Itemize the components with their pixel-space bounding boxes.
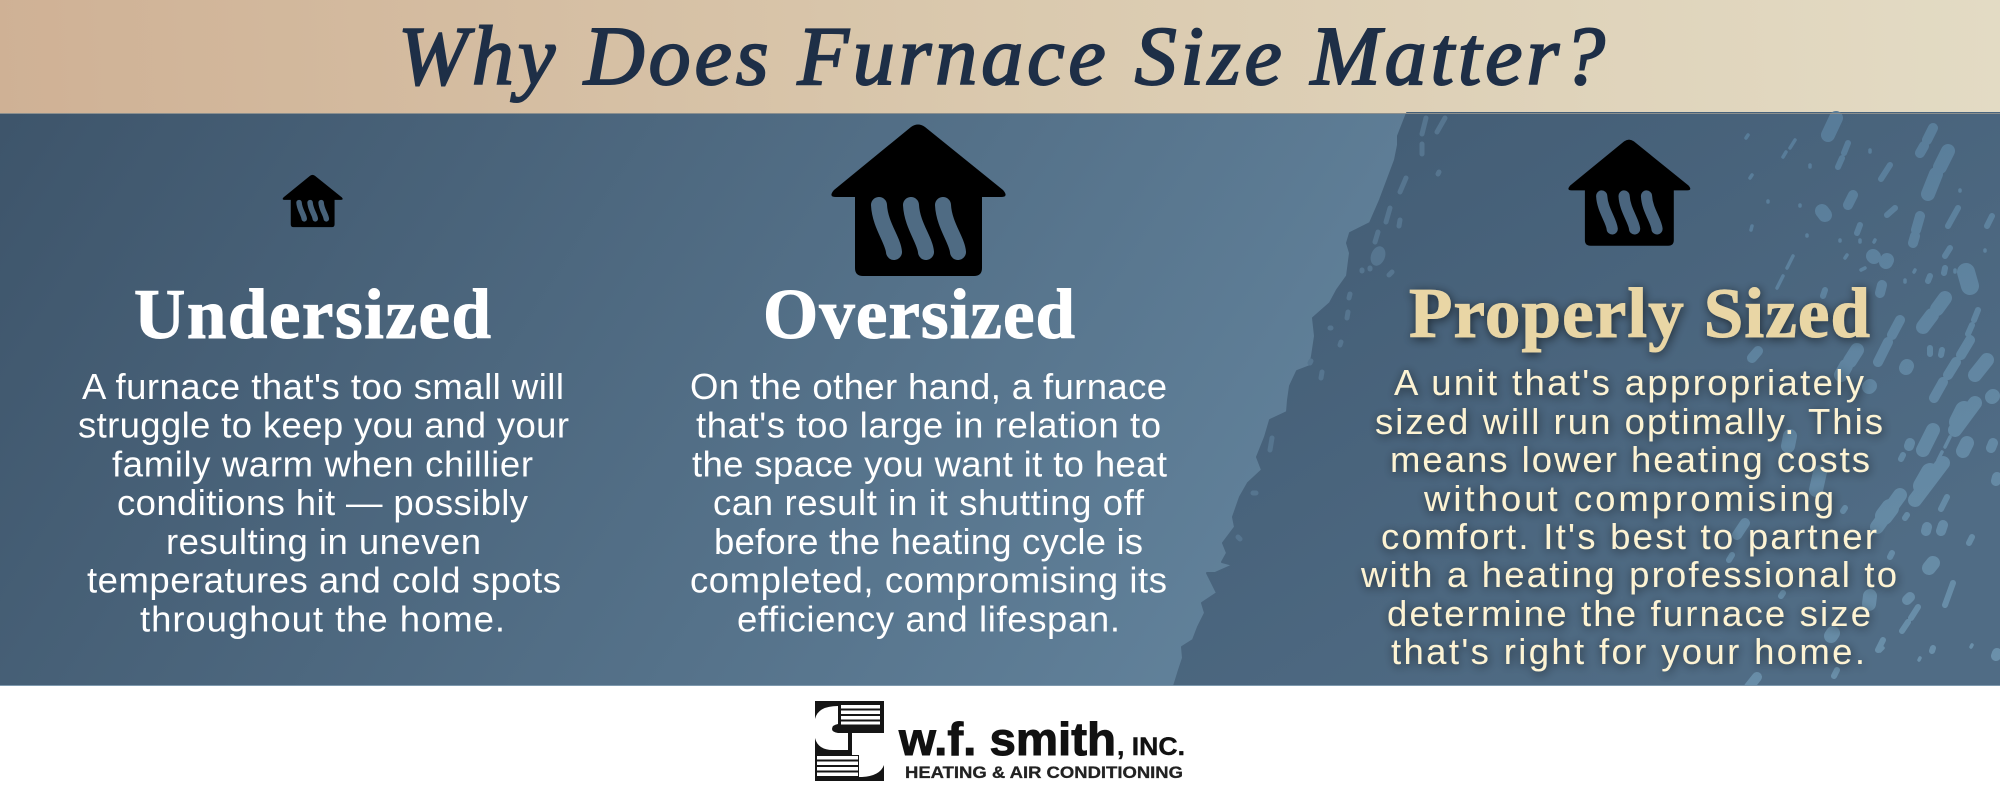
text: properly sized description: without compromising [1423,478,1834,519]
panel: oversized [690,124,1167,640]
text: oversized description: efficiency and lifespan. [737,598,1120,640]
logo tagline: HEATING & AIR CONDITIONING [905,763,1183,782]
text: properly sized description: means lower heating costs [1390,439,1870,480]
panel: properly sized [1360,140,1897,672]
text: undersized description [78,366,569,640]
icon: small furnace house [283,175,343,227]
text: properly sized description: sized will run optimally. This [1375,401,1883,442]
text: properly sized description: A unit that's appropriately [1394,362,1865,403]
text: undersized description: A furnace that's too small will [82,366,564,407]
text: undersized description: family warm when chillier [112,444,533,484]
text: oversized description [690,366,1167,640]
text: undersized description: conditions hit — possibly [117,482,529,523]
textured darker region [1174,113,2000,687]
text: properly sized description: determine the furnace size [1387,593,1871,634]
heading: Undersized: Undersized [134,276,491,354]
text: undersized description: resulting in uneven [166,521,481,562]
footer band [0,686,2000,800]
text: undersized description: throughout the home. [140,598,505,640]
text: properly sized description: that's right for your home. [1391,631,1865,672]
heading: Properly Sized: Properly Sized [1409,275,1870,353]
text: oversized description: that's too large in relation to [696,404,1161,446]
logo name: w.f. smith [898,713,1116,765]
title: Why Does Furnace Size Matter? [398,10,1605,103]
text: oversized description: On the other hand, a furnace [690,366,1167,407]
icon: large furnace house [831,124,1006,276]
panel: undersized [78,175,569,639]
splatter near edge [1238,118,1445,539]
text: properly sized description [1360,362,1897,672]
text: oversized description: before the heating cycle is [714,521,1143,562]
text: undersized description: struggle to keep you and your [78,404,569,446]
text: undersized description: temperatures and cold spots [87,560,561,600]
text: oversized description: the space you want it to heat [692,444,1167,484]
text: oversized description: completed, compromising its [690,560,1167,600]
heading: Oversized: Oversized [763,276,1075,354]
text: properly sized description: comfort. It's best to partner [1381,516,1877,557]
logo suffix: , INC. [1117,733,1185,761]
panel edge line [0,113,2000,114]
header band [0,0,2000,113]
splatter right [1729,118,1997,687]
logo mark [815,701,884,781]
icon: medium furnace house [1568,140,1690,246]
text: oversized description: can result in it shutting off [713,482,1145,523]
logo: w.f. smith, inc. [815,701,1185,782]
text: properly sized description: with a heating professional to [1360,554,1897,595]
main blue panel [0,113,2000,687]
